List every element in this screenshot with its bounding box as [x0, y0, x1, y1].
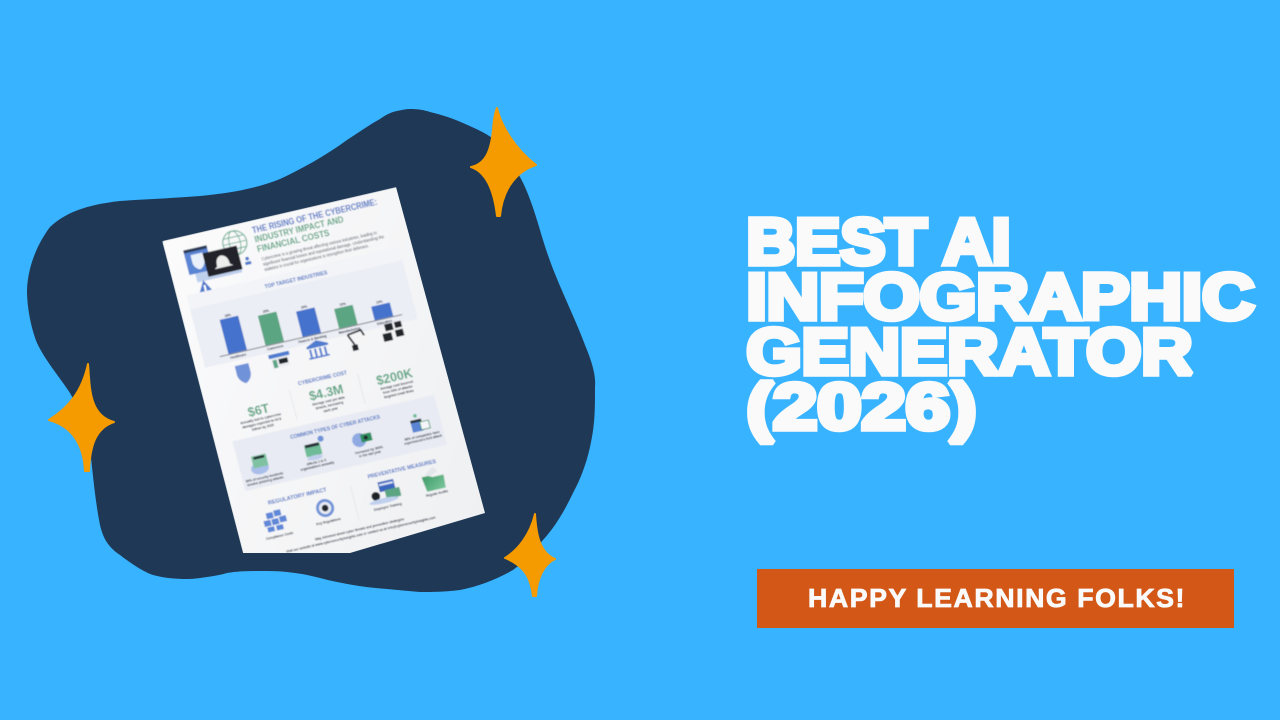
attack captions: organizations annually [300, 460, 335, 472]
stat: $6T: damages expected to hit $ [242, 417, 282, 430]
attack captions: Affects 1 in 5 [306, 458, 327, 467]
title: FINANCIAL COSTS [256, 228, 330, 254]
heading: cybercrime cost: CYBERCRIME COST [298, 370, 348, 388]
bar chart: Commerce [267, 344, 284, 351]
page sheet [162, 187, 485, 553]
icon: regular audits folder [421, 468, 446, 492]
main headline: GENERATOR [746, 316, 1192, 388]
panel: top target industries [190, 262, 404, 367]
attack captions [244, 430, 444, 488]
stat: $4.3M [308, 384, 346, 413]
stat: $6T: Annually lost to cybercrime [240, 412, 282, 425]
divider [350, 486, 359, 519]
header illustration [182, 230, 252, 293]
bar chart: 15% [339, 302, 346, 307]
title: INDUSTRY IMPACT AND [253, 214, 345, 245]
heading: common types: COMMON TYPES OF CYBER ATTACKS [290, 415, 381, 441]
bar chart: Healthcare [230, 352, 247, 360]
infographic page mockup [162, 187, 485, 553]
stat: $4.3M: breach, increasing [315, 400, 344, 411]
attack captions: 90% of security incidents [245, 471, 284, 484]
bar chart: 28% [224, 313, 232, 318]
bar chart: Education [376, 319, 393, 326]
attack icon 3 [352, 432, 374, 448]
main headline: INFOGRAPHIC [746, 261, 1254, 333]
bar chart: Manufacturing [338, 326, 361, 335]
stat: $4.3M: $4.3M [308, 382, 345, 403]
stat: $4.3M: each year [323, 406, 339, 413]
icon: shield [235, 363, 253, 385]
bar chart [219, 300, 403, 360]
sparkle star left [49, 364, 114, 471]
intro text: Cybercrime is a growing threat affecting various industries, leading to [261, 230, 378, 261]
stat: $200K: targeted small firms [384, 389, 414, 399]
stat: $6T: trillion by 2025 [252, 423, 275, 432]
main headline [746, 206, 1254, 443]
attack captions: Increased by 300% [355, 445, 384, 455]
heading: preventative measures: PREVENTATIVE MEASURES [367, 459, 437, 480]
label: key regulations: Key Regulations [316, 517, 342, 527]
intro text: significant financial losses and reputational damage. Understanding the [262, 234, 385, 267]
bar chart: 25% [262, 309, 270, 314]
attack icon 2 [303, 435, 324, 461]
bar chart: 10% [376, 300, 383, 305]
icon: compliance cubes [263, 508, 288, 533]
heading: regulatory impact: REGULATORY IMPACT [267, 487, 328, 507]
label: compliance costs: Compliance Costs [266, 531, 294, 541]
attack icon 4 [409, 411, 431, 433]
footer text: Stay informed about cyber threats and prevention strategies [314, 517, 405, 541]
attack captions: involve phishing attacks [247, 475, 284, 488]
stat: $4.3M: Average cost per data [312, 395, 345, 407]
title [251, 197, 383, 254]
title: THE RISING OF THE CYBERCRIME: [251, 197, 378, 235]
icon: robot arm [347, 329, 367, 351]
sparkle star bottom right [505, 514, 555, 596]
call to action banner: HAPPY LEARNING FOLKS! [808, 583, 1186, 613]
icon: bank [305, 338, 331, 360]
icon: key regulations [315, 498, 335, 518]
intro text: statistics is crucial for organizations to strengthen their defenses. [264, 243, 369, 272]
stat: $200K: $200K [375, 366, 414, 388]
call to action banner [757, 569, 1234, 628]
attack captions: 98% of companies have [404, 430, 440, 442]
stat: $200K: Average cost incurred [380, 380, 414, 391]
section: cybercrime cost [240, 368, 414, 432]
panel: common types of cyber attacks [232, 395, 447, 491]
attack captions: experienced a DoS attack [404, 433, 443, 446]
icon: education grid [380, 321, 405, 342]
bar chart: Finance & Banking [298, 334, 327, 344]
attack icon 1 [250, 453, 270, 475]
stat: $6T [240, 403, 282, 432]
main headline: BEST AI [746, 206, 1010, 278]
bar chart: 20% [301, 304, 308, 310]
icon: employee training [369, 478, 402, 506]
section: preventative measures [362, 458, 449, 513]
heading: top target industries: TOP TARGET INDUSTRIES [264, 270, 328, 291]
stat: $200K: from 43% of attacks [383, 384, 413, 395]
label: employee training: Employee Training [374, 502, 402, 512]
section: regulatory impact [263, 487, 342, 540]
stat: $200K [376, 368, 414, 399]
stat: $6T: $6T [246, 401, 271, 420]
sparkle star top right [471, 108, 536, 216]
icon: storefront [268, 351, 292, 369]
footer text: Visit our website at www.cybersecurityinsights.com or contact us at info@cybersecurityinsights.com [286, 515, 436, 554]
label: regular audits: Regular Audits [426, 489, 449, 498]
attack captions: in the last year [359, 450, 382, 459]
main headline: (2026) [746, 371, 976, 443]
dark blob shape [27, 109, 595, 592]
